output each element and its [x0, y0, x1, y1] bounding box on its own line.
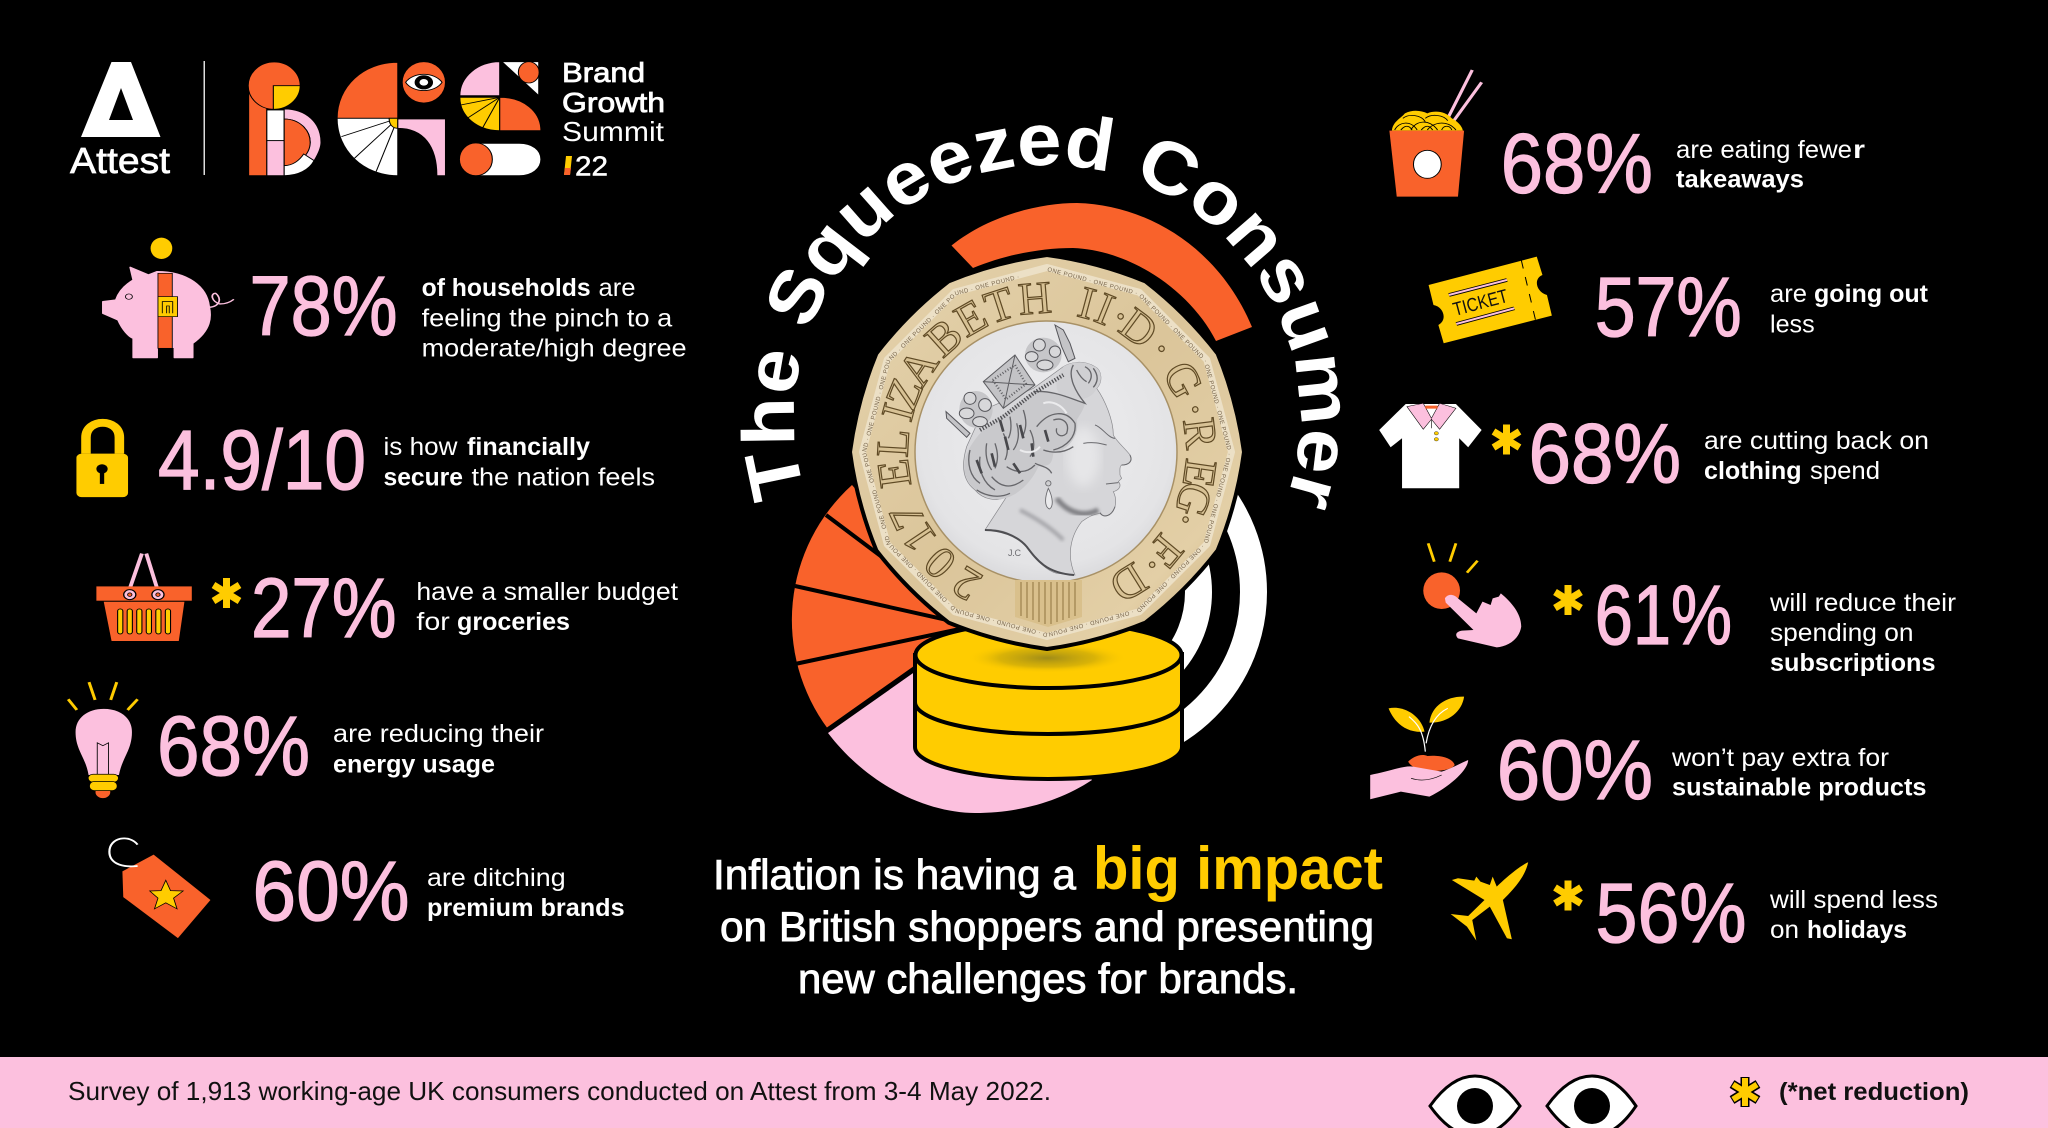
- text: financially secure: [384, 433, 655, 492]
- rim micro-lettering: ONE POUND · ONE POUND · ONE POUND · ONE POUND · ONE POUND · ONE POUND · ONE POUND · ONE POUND · ONE POUND · ONE POUND · ONE POUND · ONE POUND · ONE POUND · ONE POUND · ONE POUND · ONE POUND · ONE POUND · ONE POUND · ONE POUND · ONE POUND · ONE POUND · ONE POUND · ONE POUND ·: [862, 268, 1231, 638]
- text: financially secure: the nation feels: [472, 464, 655, 492]
- stat: 60% sustainable: [1370, 697, 1926, 817]
- stat: 27% groceries: 27%: [251, 561, 396, 655]
- text: takeaways: are eating fewe: [1676, 136, 1852, 164]
- icon: pointing hand: [1423, 543, 1521, 647]
- icon: shopping basket: [96, 554, 192, 641]
- arc: pink bottom: [828, 640, 1092, 813]
- text: premium brands: [427, 864, 625, 922]
- text: clothing: spend: [1810, 457, 1880, 485]
- date: 2: [943, 556, 990, 612]
- arc: orange top: [952, 203, 1252, 341]
- inscription: D: [1110, 297, 1167, 358]
- icon: piggy bank: [103, 238, 234, 358]
- stat: 60% sustainable: 60%: [1497, 723, 1653, 817]
- fan spokes: [795, 515, 974, 732]
- stat: 68% clothing: [1379, 403, 1929, 501]
- text: groceries: [416, 578, 678, 636]
- engraver initials: J.C: [1008, 548, 1022, 558]
- inscription: I: [1088, 282, 1122, 335]
- icon: light bulb: [68, 682, 138, 798]
- inscription: ·: [1138, 326, 1186, 371]
- hair: [964, 391, 1085, 499]
- date: [879, 496, 990, 612]
- inscription: E: [867, 456, 921, 491]
- stat: 4.9/10: [76, 413, 655, 507]
- text: sustainable: sustainable products: [1672, 774, 1926, 802]
- text: of households: of households: [422, 274, 591, 302]
- icon: aeroplane: [1451, 862, 1528, 941]
- mint mark: [1015, 580, 1082, 627]
- stat: 68% energy: [68, 682, 544, 798]
- inscription: Z: [875, 371, 933, 416]
- logo: Attest: [70, 62, 170, 181]
- text: holidays: holidays: [1807, 916, 1907, 944]
- text: going out: going out: [1814, 280, 1929, 308]
- text: of households: are: [598, 274, 636, 302]
- text: of households: moderate/high degree: [422, 334, 687, 362]
- footer band: [0, 1057, 2048, 1128]
- coin stack: [915, 622, 1182, 779]
- logo: BGS mark: [248, 62, 541, 176]
- inscription: H: [1016, 271, 1053, 325]
- text: groceries: for: [416, 608, 450, 636]
- date: 1: [891, 514, 946, 561]
- stat: 78% of households: 78%: [250, 259, 398, 353]
- inscription: F: [1138, 525, 1194, 577]
- date: 7: [879, 496, 935, 538]
- text: financially secure: secure: [384, 464, 463, 492]
- text: of households: [422, 274, 687, 362]
- icon: hand with seedling: [1370, 697, 1468, 799]
- central statement: [713, 835, 1383, 1002]
- text: groceries: groceries: [457, 608, 570, 636]
- text: holidays: [1769, 886, 1938, 944]
- stat: 68% takeaways: 68%: [1501, 117, 1653, 211]
- text: financially secure: financially: [467, 433, 590, 461]
- stat: 60% premium brands: 60%: [252, 844, 410, 938]
- header logos: [70, 57, 665, 182]
- text: going out: are: [1770, 280, 1807, 308]
- central statement: new challenges for brands.: [798, 955, 1298, 1002]
- footer: net reduction: (*net reduction): [1779, 1078, 1969, 1106]
- silver centre: [915, 321, 1177, 583]
- inscription: I: [1073, 276, 1101, 329]
- text: holidays: will spend less: [1769, 886, 1938, 914]
- text: subscriptions: spending on: [1770, 619, 1914, 647]
- asterisk: [1555, 585, 1581, 615]
- logo: Brand Growth Summit: [562, 57, 665, 182]
- inscription: ·: [1169, 395, 1222, 424]
- inscription: ·: [1129, 541, 1175, 589]
- footer: survey note: Survey of 1,913 working-age UK consumers conducted on Attest from 3-4 May 2022.: [68, 1076, 1051, 1106]
- icon: noodle box: [1389, 70, 1482, 197]
- text: groceries: have a smaller budget: [416, 578, 678, 606]
- earring: [1046, 481, 1051, 486]
- stat: 27% groceries: [96, 554, 678, 655]
- title: The Squeezed Consumer: [740, 116, 1340, 510]
- stat: 60% premium brands: [109, 838, 625, 938]
- stat: 68% takeaways: [1389, 70, 1865, 211]
- inscription: ·: [1102, 290, 1140, 342]
- text: energy usage: [333, 720, 544, 778]
- icon: footer asterisk: [1732, 1077, 1758, 1107]
- text: going out: less: [1770, 311, 1815, 339]
- logo: Brand Growth Summit: 22: [575, 150, 608, 182]
- inscription: E: [946, 289, 996, 347]
- text: going out: [1770, 280, 1929, 339]
- pound coin: [852, 257, 1242, 651]
- text: clothing: are cutting back on: [1704, 427, 1929, 455]
- text: of households: feeling the pinch to a: [422, 304, 672, 332]
- stat: 56% holidays: 56%: [1596, 866, 1746, 960]
- asterisk: [1555, 880, 1581, 910]
- fan: orange wedges: [792, 485, 974, 729]
- portrait of the Queen: [946, 325, 1131, 575]
- asterisk: [214, 578, 240, 608]
- inscription: B: [915, 308, 972, 366]
- icon: polo shirt: [1379, 403, 1482, 488]
- stat: 4.9/10: 4.9/10: [158, 413, 366, 507]
- stat: 57% going out: [1429, 257, 1929, 354]
- central statement: big impact: [1093, 835, 1383, 902]
- inscription: [866, 271, 1228, 613]
- rim band: [862, 268, 1232, 636]
- central statement: on British shoppers and presenting: [720, 903, 1374, 950]
- inscription: I: [871, 398, 924, 426]
- text: sustainable: [1671, 744, 1926, 802]
- inscription: E: [1173, 456, 1227, 491]
- text: energy usage: energy usage: [333, 750, 495, 778]
- icon: padlock: [76, 423, 128, 497]
- logo: Attest: Attest: [70, 140, 170, 181]
- text: energy usage: are reducing their: [333, 720, 544, 748]
- logo: Brand Growth Summit: Brand: [562, 57, 645, 88]
- icon: ticket: [1429, 257, 1552, 343]
- stat: 61% subscriptions: 61%: [1595, 568, 1732, 662]
- asterisk: [1494, 424, 1520, 454]
- text: sustainable: won’t pay extra for: [1671, 744, 1889, 772]
- date: 0: [914, 537, 966, 589]
- text: premium brands: premium brands: [427, 894, 625, 922]
- inscription: D: [1101, 553, 1156, 613]
- stat: 57% going out: 57%: [1595, 260, 1742, 354]
- inscription: A: [888, 339, 948, 395]
- stat: 68% clothing: 68%: [1529, 407, 1681, 501]
- text: premium brands: are ditching: [427, 864, 566, 892]
- text: clothing: [1704, 427, 1929, 485]
- inscription: L: [866, 428, 919, 459]
- logo: Brand Growth Summit: Growth: [562, 87, 665, 118]
- text: takeaways: r: [1853, 136, 1865, 164]
- text: subscriptions: will reduce their: [1769, 589, 1956, 617]
- stat: 68% energy: 68%: [157, 699, 310, 793]
- text: financially secure: is how: [384, 433, 458, 461]
- text: takeaways: [1676, 136, 1865, 194]
- text: holidays: on: [1770, 916, 1799, 944]
- text: subscriptions: subscriptions: [1770, 649, 1936, 677]
- inscription: ·: [1160, 502, 1212, 538]
- logo: Brand Growth Summit: Summit: [562, 116, 664, 147]
- stat: 61% subscriptions: [1423, 543, 1956, 677]
- text: subscriptions: [1769, 589, 1956, 677]
- icon: price tag: [109, 838, 210, 938]
- inscription: G: [1165, 476, 1223, 523]
- inscription: G: [1153, 353, 1214, 406]
- text: takeaways: takeaways: [1676, 166, 1804, 194]
- text: clothing: clothing: [1704, 457, 1802, 485]
- icon: eyes: [1430, 1076, 1636, 1128]
- tiara: [983, 355, 1035, 408]
- inscription: T: [978, 276, 1021, 334]
- inscription: R: [1173, 415, 1228, 452]
- stat: 56% holidays: [1451, 862, 1938, 960]
- icon: ticket: TICKET: [1451, 286, 1511, 321]
- central statement: Inflation is having a: [713, 851, 1077, 898]
- stat: 78% of households: [103, 238, 687, 362]
- arcs: white rings right: [1172, 494, 1267, 742]
- central coin graphic: [792, 203, 1267, 813]
